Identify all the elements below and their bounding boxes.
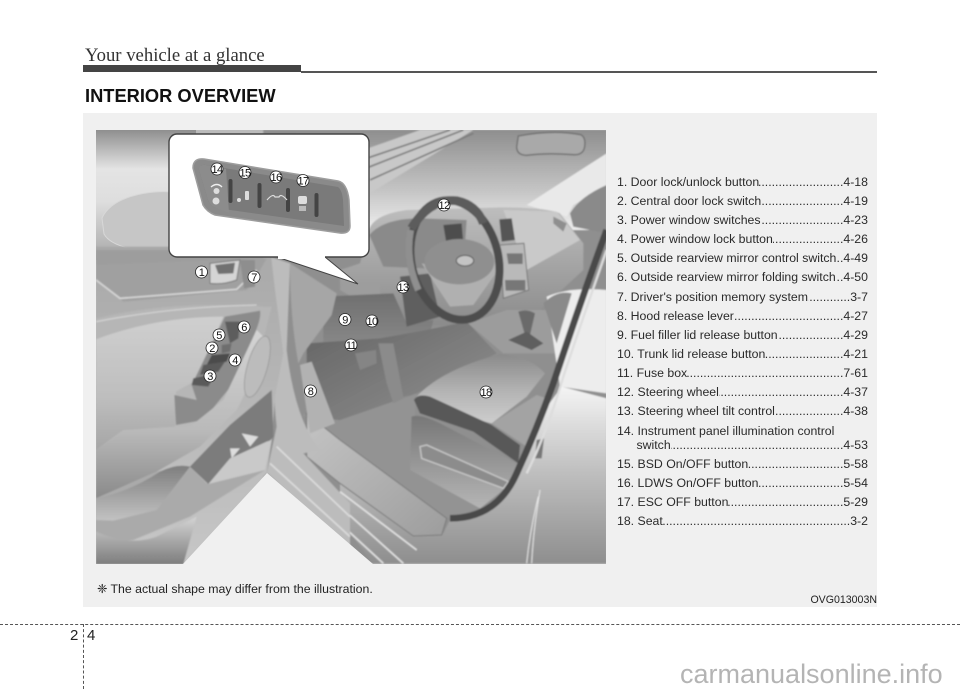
- parts list: 3-2: [850, 514, 868, 528]
- parts list: 3. Power window switches: [617, 213, 761, 227]
- figure code: OVG013003N: [810, 594, 877, 606]
- number markers 1-13 and 18: 13: [397, 282, 409, 294]
- armrest: [96, 330, 267, 498]
- number markers 1-13 and 18: 12: [438, 200, 450, 212]
- parts list: 6. Outside rearview mirror folding switch: [617, 270, 836, 284]
- gear shifter: [518, 310, 535, 335]
- carpet: [307, 322, 497, 423]
- number markers 1-13 and 18: 3: [207, 371, 213, 383]
- door bottom: [96, 517, 197, 564]
- center console: [468, 310, 560, 353]
- illustration: car interior: [96, 130, 606, 564]
- number markers 1-13 and 18: 11: [346, 340, 357, 352]
- number markers 1-13 and 18: 2: [209, 343, 215, 355]
- parts list: 4-53: [843, 438, 868, 452]
- header rule: [83, 65, 877, 73]
- parts list: 4-49: [843, 251, 868, 265]
- parts list: 4-38: [843, 404, 868, 418]
- rearview mirror: [517, 132, 585, 155]
- parts list: 5-54: [843, 476, 868, 490]
- parts list: 4. Power window lock button: [617, 232, 773, 246]
- dashboard top: [340, 207, 583, 327]
- footer crop lines: [0, 624, 960, 689]
- number markers 1-13 and 18: [196, 199, 492, 399]
- number markers 14-17: 17: [297, 176, 309, 188]
- switch panel: [174, 311, 260, 425]
- number markers 1-13 and 18: 10: [366, 316, 378, 328]
- illustration note: ❈ The actual shape may differ from the illustration.: [97, 582, 373, 596]
- right vent: [553, 217, 567, 232]
- inset panel: [96, 317, 223, 450]
- panel: background: [83, 113, 877, 607]
- speaker: [239, 333, 276, 400]
- number markers 14-17: 16: [270, 172, 282, 184]
- number markers 14-17: [211, 163, 309, 188]
- parts list: 4-26: [843, 232, 868, 246]
- number markers 1-13 and 18: 6: [241, 322, 247, 334]
- parts list: 4-37: [843, 385, 868, 399]
- cabin and dashboard: [263, 130, 607, 563]
- parts list: 15. BSD On/OFF button: [617, 457, 748, 471]
- page number chapter: 2: [70, 627, 78, 644]
- door pocket: [190, 390, 273, 484]
- right door pillar and sill: [340, 387, 607, 563]
- center vent: [443, 223, 463, 245]
- parts list: 18. Seat: [617, 514, 663, 528]
- arm band: [96, 305, 272, 340]
- number markers 14-17: 15: [239, 168, 251, 180]
- side mirror outline: [102, 192, 172, 252]
- parts list: [617, 175, 868, 528]
- parts list: 10. Trunk lid release button: [617, 347, 765, 361]
- lower dash left: [340, 283, 380, 300]
- number markers 1-13 and 18: 18: [480, 387, 492, 399]
- parts list: 4-29: [843, 328, 868, 342]
- parts list: 4-21: [843, 347, 868, 361]
- number markers 1-13 and 18: 5: [216, 330, 222, 342]
- section heading: INTERIOR OVERVIEW: [85, 85, 276, 106]
- seat: [410, 354, 552, 508]
- parts list: 9. Fuel filler lid release button: [617, 328, 778, 342]
- upper door band: [96, 258, 267, 302]
- parts list: 7. Driver's position memory system: [617, 290, 808, 304]
- parts list: 7-61: [843, 366, 868, 380]
- parts list: switch: [636, 438, 671, 452]
- upper right glass: [527, 153, 607, 217]
- parts list: 5-29: [843, 495, 868, 509]
- steering wheel: [398, 191, 512, 329]
- parts list: ..: [837, 251, 843, 265]
- parts list: 4-27: [843, 309, 868, 323]
- door rubber seal: [450, 230, 607, 518]
- parts list: 5. Outside rearview mirror control switch: [617, 251, 836, 265]
- parts list: 14. Instrument panel illumination control: [617, 424, 834, 438]
- number markers 1-13 and 18: 7: [251, 272, 257, 284]
- number markers 1-13 and 18: 1: [199, 267, 205, 279]
- door handle: [210, 260, 240, 284]
- parts list: 5-58: [843, 457, 868, 471]
- icons on switches: [211, 184, 222, 187]
- parts list: 1. Door lock/unlock button: [617, 175, 759, 189]
- parts list: 2. Central door lock switch: [617, 194, 761, 208]
- pedal: [378, 343, 410, 403]
- callout tail: [277, 257, 358, 284]
- center stack: [500, 243, 529, 298]
- A pillar stripes: [360, 130, 473, 200]
- switch panel: [193, 159, 350, 233]
- callout: switch detail: [169, 134, 369, 284]
- parts list: 17. ESC OFF button: [617, 495, 728, 509]
- parts list: 4-50: [843, 270, 868, 284]
- parts list: 8. Hood release lever: [617, 309, 734, 323]
- parts list: 4-19: [843, 194, 868, 208]
- sill plate: [307, 413, 447, 536]
- background behind callout: [96, 130, 606, 564]
- floor opening: [183, 473, 373, 564]
- door body: [96, 247, 283, 564]
- parts list: 4-18: [843, 175, 868, 189]
- page header title: Your vehicle at a glance: [85, 45, 265, 66]
- parts list: 4-23: [843, 213, 868, 227]
- parts list: 11. Fuse box: [617, 366, 687, 380]
- instrument cluster: [369, 218, 467, 270]
- parts list: 13. Steering wheel tilt control: [617, 404, 775, 418]
- hinge pillar: [267, 257, 350, 557]
- parts list: ..: [837, 270, 843, 284]
- number markers 1-13 and 18: 8: [308, 386, 314, 398]
- windshield: [297, 130, 607, 230]
- parts list: 12. Steering wheel: [617, 385, 719, 399]
- watermark: carmanualsonline.info: [680, 659, 943, 689]
- parts list: 16. LDWS On/OFF button: [617, 476, 758, 490]
- door and frame: [96, 247, 350, 567]
- parts list: 3-7: [850, 290, 868, 304]
- number markers 14-17: 14: [211, 164, 223, 176]
- lower door: [96, 467, 265, 543]
- page number page: 4: [87, 627, 95, 644]
- number markers 1-13 and 18: 4: [232, 355, 238, 367]
- number markers 1-13 and 18: 9: [342, 314, 348, 326]
